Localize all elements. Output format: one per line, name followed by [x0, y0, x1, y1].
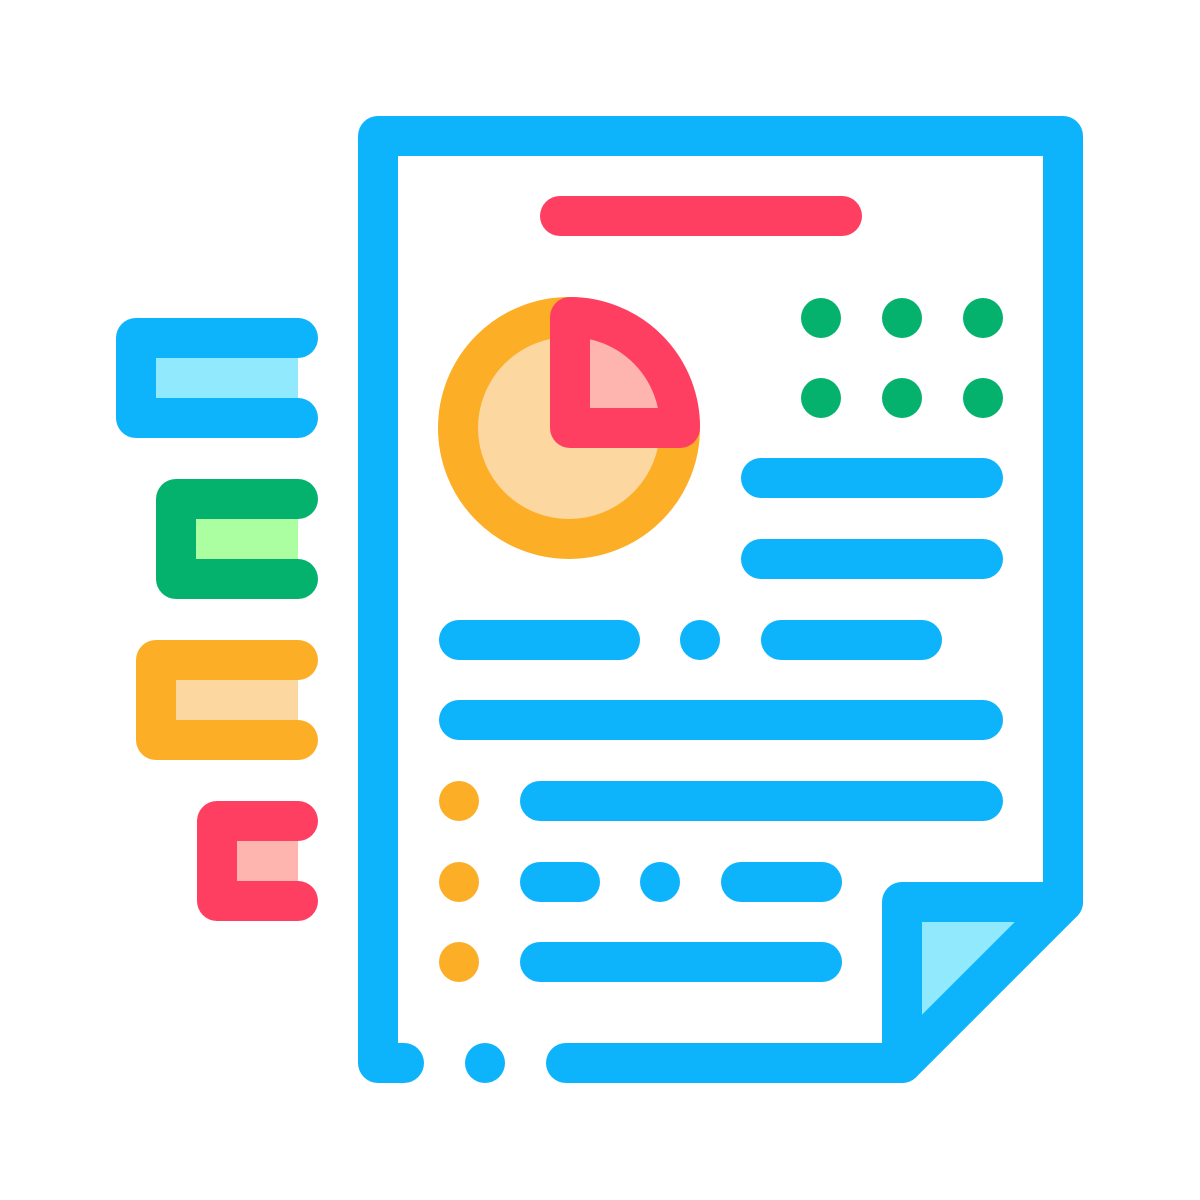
green dots	[801, 298, 1003, 418]
document outline	[378, 136, 1063, 1083]
text lines	[459, 478, 983, 962]
pie chart	[458, 317, 680, 539]
tab: blue	[136, 338, 298, 418]
bullet dots	[439, 781, 479, 982]
title bar	[560, 196, 842, 236]
tab: green	[176, 499, 298, 579]
tab: red	[217, 821, 298, 901]
tab: orange	[156, 660, 298, 740]
